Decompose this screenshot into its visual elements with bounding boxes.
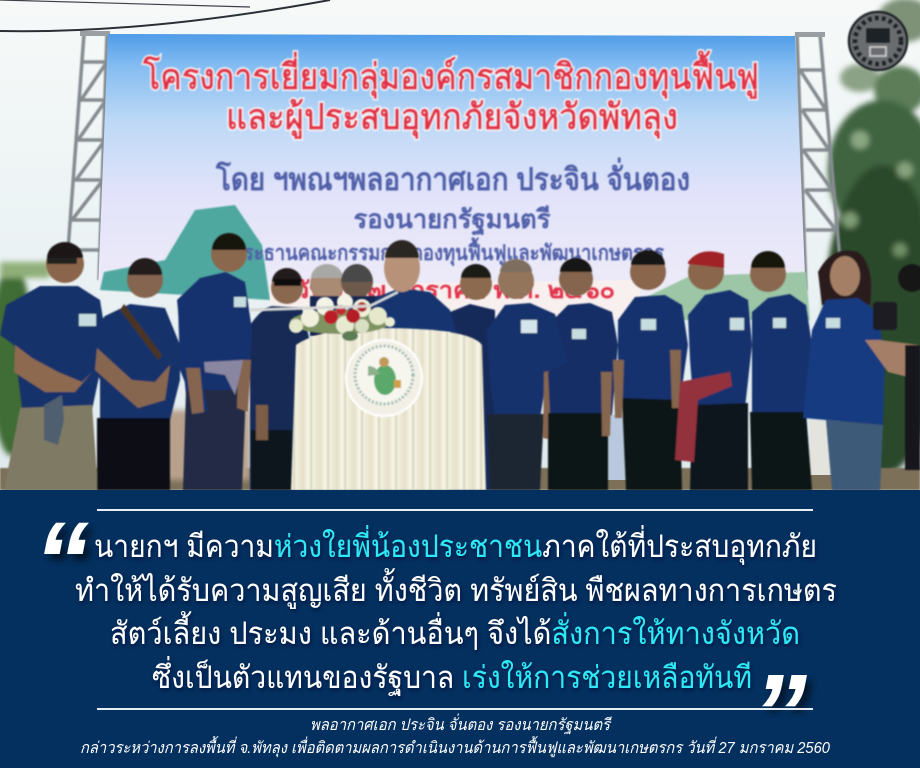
banner: วันที่ ๒๗ มกราคม พ.ศ. ๒๕๖๐ — [295, 273, 615, 303]
person 10 — [752, 294, 812, 415]
quote text: ทำให้ได้รับความสูญเสีย ทั้งชีวิต ทรัพย์สิน พืชผลทางการเกษตร — [75, 568, 837, 609]
banner: ประธานคณะกรรมการกองทุนฟื้นฟูและพัฒนาเกษตรกร — [232, 237, 665, 267]
bottom rule — [97, 708, 813, 710]
attribution: พลอากาศเอก ประจิน จั่นตอง รองนายกรัฐมนตรี — [310, 713, 612, 735]
quote text — [75, 525, 837, 696]
trees — [0, 0, 920, 475]
person 1 — [0, 286, 108, 410]
podium emblem — [346, 340, 422, 416]
quote panel — [0, 490, 920, 768]
person 4 — [250, 306, 312, 490]
person 8 — [618, 295, 688, 402]
banner: โดย ฯพณฯพลอากาศเอก ประจิน จั่นตอง — [215, 157, 690, 197]
banner: และผู้ประสบอุทกภัยจังหวัดพัทลุง — [226, 96, 678, 140]
banner: รองนายกรัฐมนตรี — [354, 204, 551, 237]
ground — [0, 468, 920, 490]
attribution: กล่าวระหว่างการลงพื้นที่ จ.พัทลุง เพื่อติดตามผลการดำเนินงานด้านการฟื้นฟูและพัฒนาเกษตรกร วันที่ 27 มกราคม 2560 — [80, 736, 830, 758]
people — [0, 233, 920, 490]
person 9 — [688, 290, 752, 410]
microphone — [250, 292, 398, 310]
person 3 — [177, 272, 252, 395]
emblem: government seal — [849, 12, 907, 70]
back row heads — [310, 267, 344, 301]
opening quote mark: “ — [34, 500, 89, 623]
photographer — [865, 340, 920, 380]
photo: event on stage — [0, 0, 920, 490]
person 2 — [85, 304, 180, 420]
person 7 — [548, 303, 618, 415]
quote text: ซึ่งเป็นตัวแทนของรัฐบาล เร่งให้การช่วยเหลือทันที — [152, 656, 752, 696]
flower arrangement — [289, 294, 395, 341]
quote text: นายกฯ มีความห่วงใยพี่น้องประชาชนภาคใต้ที่ประสบอุทกภัย — [94, 525, 817, 566]
quote text: สัตว์เลี้ยง ประมง และด้านอื่นๆ จึงได้สั่งการให้ทางจังหวัด — [110, 611, 800, 651]
person 5 behind right — [450, 304, 495, 490]
attribution — [80, 713, 830, 758]
podium — [250, 292, 486, 490]
power lines — [0, 0, 330, 31]
banner — [98, 34, 810, 320]
truss towers — [68, 34, 840, 290]
banner: โครงการเยี่ยมกลุ่มองค์กรสมาชิกกองทุนฟื้นฟู — [142, 50, 759, 100]
woman — [818, 251, 871, 305]
person 6 — [487, 303, 569, 418]
speaker — [375, 288, 456, 332]
top rule — [97, 509, 813, 511]
